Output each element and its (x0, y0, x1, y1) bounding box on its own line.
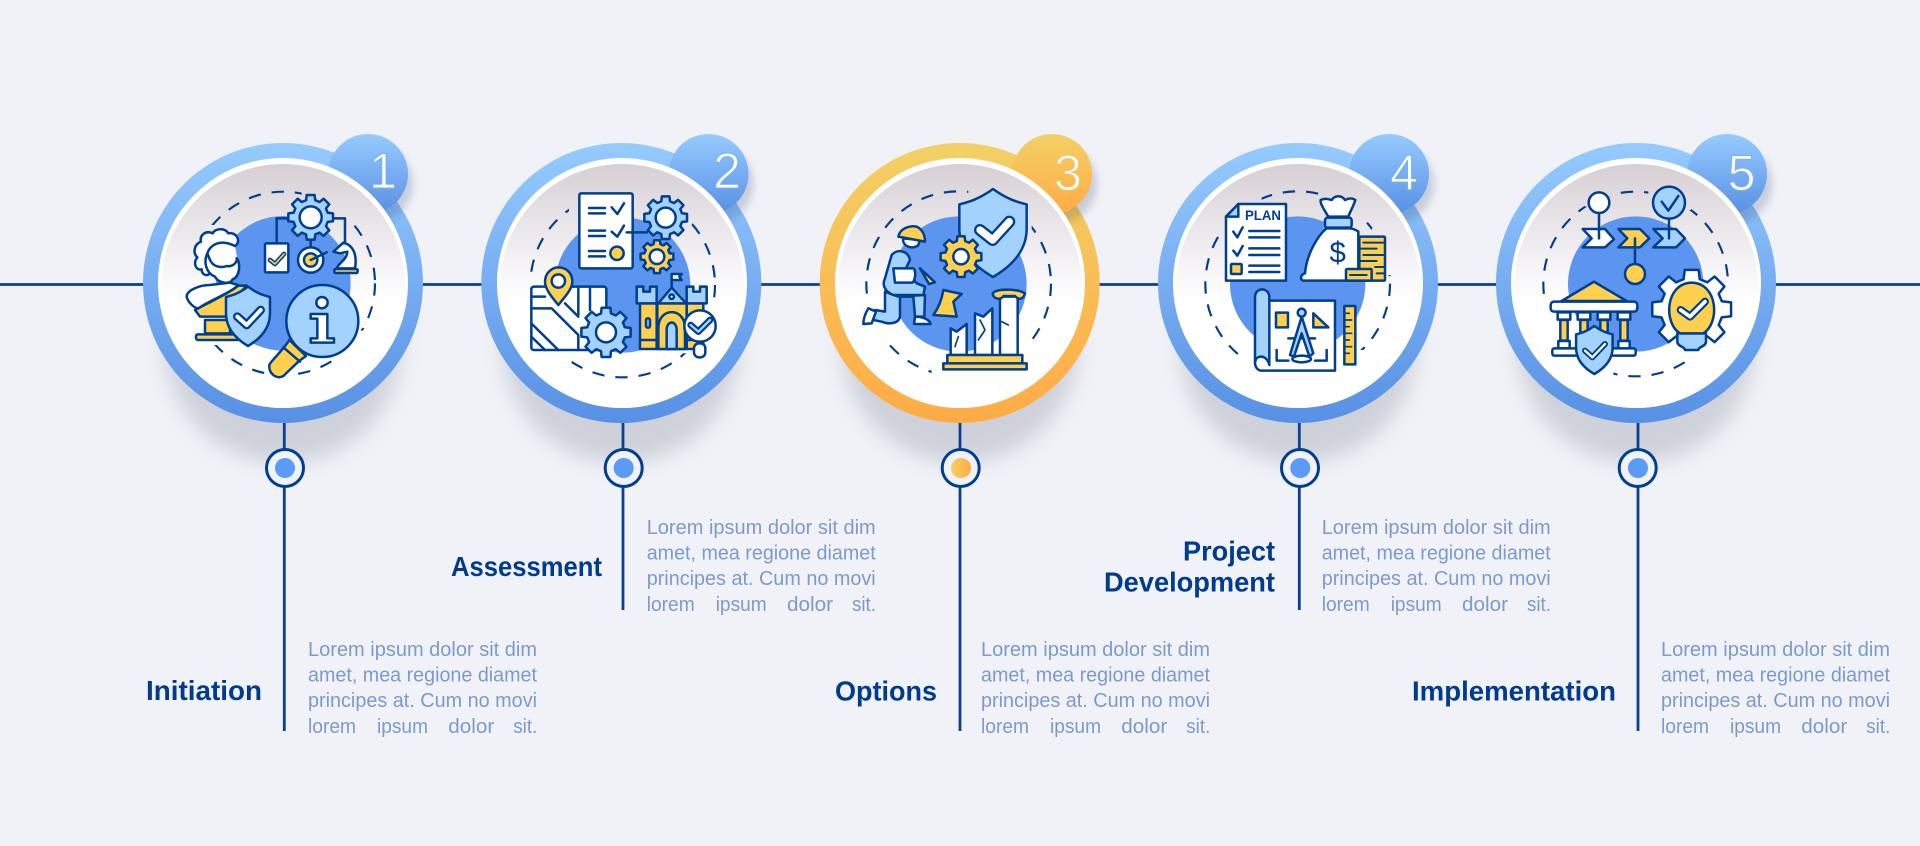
text block 5: ipsum (1730, 716, 1781, 738)
panel: step 2 assessment (451, 134, 876, 616)
ring 4 with badge (1158, 134, 1438, 423)
text block 4: principes at. Cum no movi (1322, 568, 1551, 590)
text block 4: dolor (1462, 594, 1508, 616)
icon: checklist, gears, map and castle (530, 193, 716, 377)
text block 3 (981, 639, 1210, 738)
text block 2: sit. (852, 594, 876, 616)
horizontal timeline line (0, 283, 1920, 286)
text block 4: ipsum (1391, 594, 1442, 616)
heading: Project Development (1104, 536, 1275, 598)
text block 2: lorem (647, 594, 695, 616)
text block 4 (1322, 517, 1551, 616)
text block 1: ipsum (377, 716, 428, 738)
text block 5: sit. (1866, 716, 1890, 738)
icon: plan, money bag and blueprint: PLAN (1245, 207, 1281, 223)
text block 3: sit. (1186, 716, 1210, 738)
text block 5: dolor (1801, 716, 1848, 738)
text block 5: amet, mea regione diamet (1661, 665, 1890, 687)
text block 5: Lorem ipsum dolor sit dim (1661, 639, 1890, 661)
icon: bust, strategy chart, shield and info magnifier (187, 192, 375, 377)
text block 4: sit. (1527, 594, 1551, 616)
text block 2: Lorem ipsum dolor sit dim (647, 517, 876, 539)
text block 5 (1661, 639, 1890, 738)
ring 4 with badge: 4 (1390, 145, 1418, 201)
text block 2: ipsum (716, 594, 767, 616)
heading: Project Development: Development (1104, 567, 1275, 598)
connector line and node 4 (1282, 423, 1318, 610)
panel: step 4 project development (1104, 134, 1551, 616)
ring 3 with badge: 3 (1054, 145, 1082, 201)
heading: Project Development: Project (1183, 536, 1275, 567)
text block 2: amet, mea regione diamet (647, 543, 876, 565)
text block 5: principes at. Cum no movi (1661, 690, 1890, 712)
text block 3: lorem (981, 716, 1029, 738)
text block 4: lorem (1322, 594, 1370, 616)
icon: worker, shield, gear and ruined columns (863, 189, 1051, 376)
text block 1: sit. (513, 716, 537, 738)
ring 1 with badge: 1 (369, 143, 397, 199)
connector line and node 2 (605, 423, 642, 610)
text block 1: lorem (308, 716, 356, 738)
text block 2: dolor (787, 594, 833, 616)
text block 1: amet, mea regione diamet (308, 665, 537, 687)
heading: Options: Options (835, 676, 937, 707)
ring 3 with badge (820, 134, 1100, 423)
heading: Assessment: Assessment (451, 551, 602, 582)
heading: Initiation: Initiation (146, 675, 262, 706)
ring 1 with badge (143, 134, 423, 423)
icon: plan, money bag and blueprint: $ (1330, 237, 1346, 270)
text block 1: dolor (448, 716, 495, 738)
panel: step 3 options (820, 134, 1210, 738)
text block 1: Lorem ipsum dolor sit dim (308, 639, 537, 661)
ring 5 with badge (1496, 134, 1776, 423)
text block 2: principes at. Cum no movi (647, 568, 876, 590)
text block 1 (308, 639, 537, 738)
text block 3: Lorem ipsum dolor sit dim (981, 639, 1210, 661)
connector line and node 1 (266, 423, 304, 731)
text block 3: principes at. Cum no movi (981, 690, 1210, 712)
icon: milestones, temple with shield and lightbulb gear (1543, 187, 1731, 376)
panel: step 5 implementation (1412, 134, 1890, 738)
connector line and node 5 (1619, 423, 1656, 731)
connector line and node 3 (942, 423, 979, 731)
text block 1: principes at. Cum no movi (308, 690, 537, 712)
text block 3: dolor (1121, 716, 1168, 738)
text block 4: Lorem ipsum dolor sit dim (1322, 517, 1551, 539)
text block 3: amet, mea regione diamet (981, 665, 1210, 687)
heading: Implementation: Implementation (1412, 676, 1616, 707)
ring 5 with badge: 5 (1728, 145, 1756, 201)
ring 2 with badge: 2 (713, 143, 741, 199)
icon: plan, money bag and blueprint (1205, 191, 1390, 376)
text block 4: amet, mea regione diamet (1322, 543, 1551, 565)
ring 2 with badge (481, 134, 761, 423)
panel: step 1 initiation (143, 134, 537, 738)
text block 3: ipsum (1050, 716, 1101, 738)
text block 5: lorem (1661, 716, 1709, 738)
text block 2 (647, 517, 876, 616)
